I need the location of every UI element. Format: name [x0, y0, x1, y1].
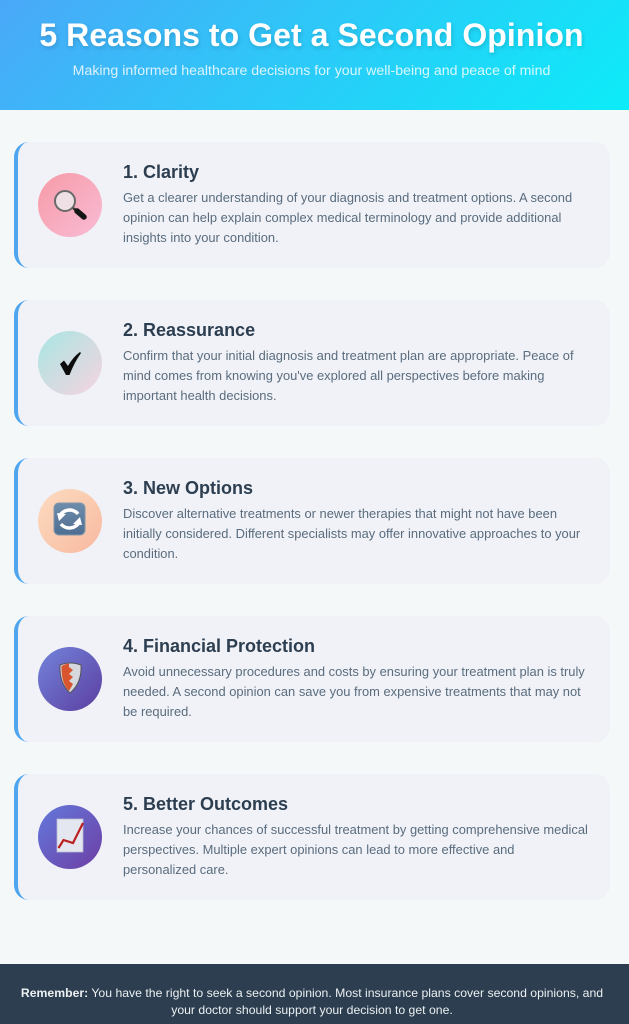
- text: Better Outcomes description: [123, 822, 588, 877]
- panel: 3. New Options: [14, 458, 610, 584]
- heading: Financial Protection: 4. Financial Protection: [123, 636, 315, 656]
- text: Reassurance description: Confirm that your initial diagnosis and treatment plan are appropriate. Peace of: [123, 348, 574, 363]
- text: Financial Protection description: Avoid unnecessary procedures and costs by ensuring your treatment plan is truly: [123, 664, 585, 679]
- heading: Reassurance: 2. Reassurance: [123, 320, 255, 340]
- heading: New Options: 3. New Options: [123, 478, 253, 498]
- text: Better Outcomes description: Increase your chances of successful treatment by getting comprehensive medical: [123, 822, 588, 837]
- text: Better Outcomes description: personalized care.: [123, 862, 228, 877]
- text: Clarity description: opinion can help explain complex medical terminology and provide additional: [123, 210, 561, 225]
- text: Reassurance description: mind comes from knowing you've explored all perspectives before making: [123, 368, 544, 383]
- title: 5 Reasons to Get a Second Opinion: [39, 17, 584, 53]
- panel: 1. Clarity: [14, 142, 610, 268]
- footer callout: your doctor should support your decision to get one.: [171, 1003, 453, 1017]
- icon: rising chart: [38, 805, 102, 869]
- text: Reassurance description: [123, 348, 574, 403]
- icon: magnifying glass: [38, 173, 102, 237]
- text: Clarity description: [123, 190, 572, 245]
- text: Financial Protection description: be required.: [123, 704, 192, 719]
- subtitle: Making informed healthcare decisions for your well-being and peace of mind: [73, 63, 550, 79]
- text: Financial Protection description: [123, 664, 585, 719]
- icon: check mark: [38, 331, 102, 395]
- heading: Clarity: 1. Clarity: [123, 162, 199, 182]
- text: Financial Protection description: needed. A second opinion can save you from expensive treatments that may not: [123, 684, 581, 699]
- panel: 5. Better Outcomes: [14, 774, 610, 900]
- icon: shield: [38, 647, 102, 711]
- text: Clarity description: Get a clearer understanding of your diagnosis and treatment options. A second: [123, 190, 572, 205]
- panel: 2. Reassurance: [14, 300, 610, 426]
- icon: refresh arrows: [38, 489, 102, 553]
- text: Better Outcomes description: perspectives. Multiple expert opinions can lead to more effective and: [123, 842, 514, 857]
- text: New Options description: [123, 506, 580, 561]
- heading: Better Outcomes: 5. Better Outcomes: [123, 794, 288, 814]
- header banner: [0, 0, 629, 110]
- panel: 4. Financial Protection: [14, 616, 610, 742]
- footer background: [0, 964, 629, 1024]
- text: Reassurance description: important health decisions.: [123, 388, 277, 403]
- footer callout: [21, 986, 603, 1017]
- footer callout: Remember: You have the right to seek a second opinion. Most insurance plans cover second opinions, and: [21, 986, 603, 1000]
- text: New Options description: initially considered. Different specialists may offer innovative approaches to your: [123, 526, 580, 541]
- text: New Options description: condition.: [123, 546, 178, 561]
- text: New Options description: Discover alternative treatments or newer therapies that might not have been: [123, 506, 557, 521]
- text: Clarity description: insights into your condition.: [123, 230, 279, 245]
